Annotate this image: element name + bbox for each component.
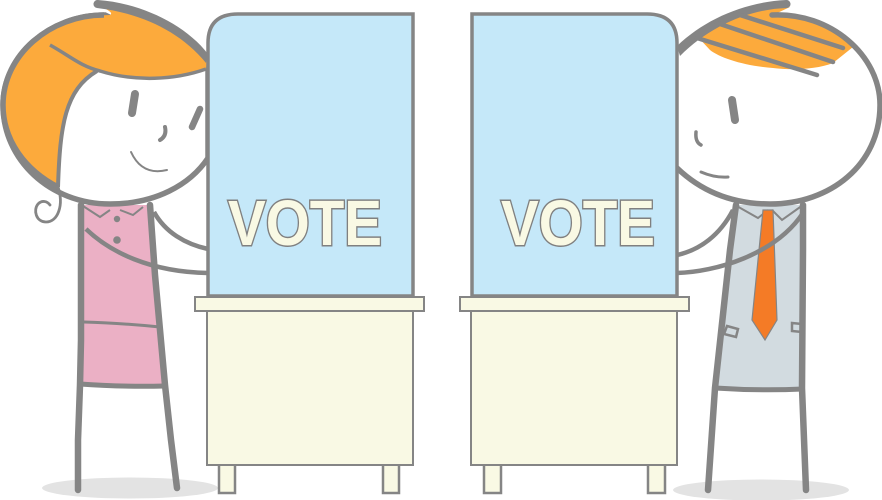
left booth label: VOTE: [228, 187, 382, 259]
left booth shelf: [195, 297, 424, 311]
man legs and torso lines: [708, 205, 806, 490]
woman face: [131, 94, 200, 171]
man tie: [752, 210, 777, 340]
man face: [696, 100, 735, 177]
right booth screen: [472, 14, 677, 296]
right booth cabinet: [471, 310, 677, 465]
woman hair curl: [36, 187, 60, 222]
man suit: [715, 205, 803, 390]
voting booth: left: [195, 14, 424, 493]
woman legs and torso lines: [78, 205, 177, 490]
left booth cabinet: [207, 310, 413, 465]
ground shadow: man: [673, 480, 849, 500]
character: man: [677, 0, 880, 490]
voting booth: right: [460, 14, 689, 493]
character: woman: [3, 0, 208, 490]
ground shadow: woman: [42, 478, 218, 498]
left booth legs: [219, 465, 399, 493]
woman arms: [86, 212, 208, 273]
left booth screen: [208, 14, 413, 296]
right booth legs: [484, 465, 665, 493]
right booth label: VOTE: [501, 187, 655, 259]
woman hair: [3, 0, 208, 187]
woman head: [3, 15, 208, 204]
man head: [677, 15, 880, 204]
woman dress: [80, 205, 165, 386]
man hair: [677, 0, 880, 204]
man arms: [677, 210, 803, 273]
right booth shelf: [460, 297, 689, 311]
